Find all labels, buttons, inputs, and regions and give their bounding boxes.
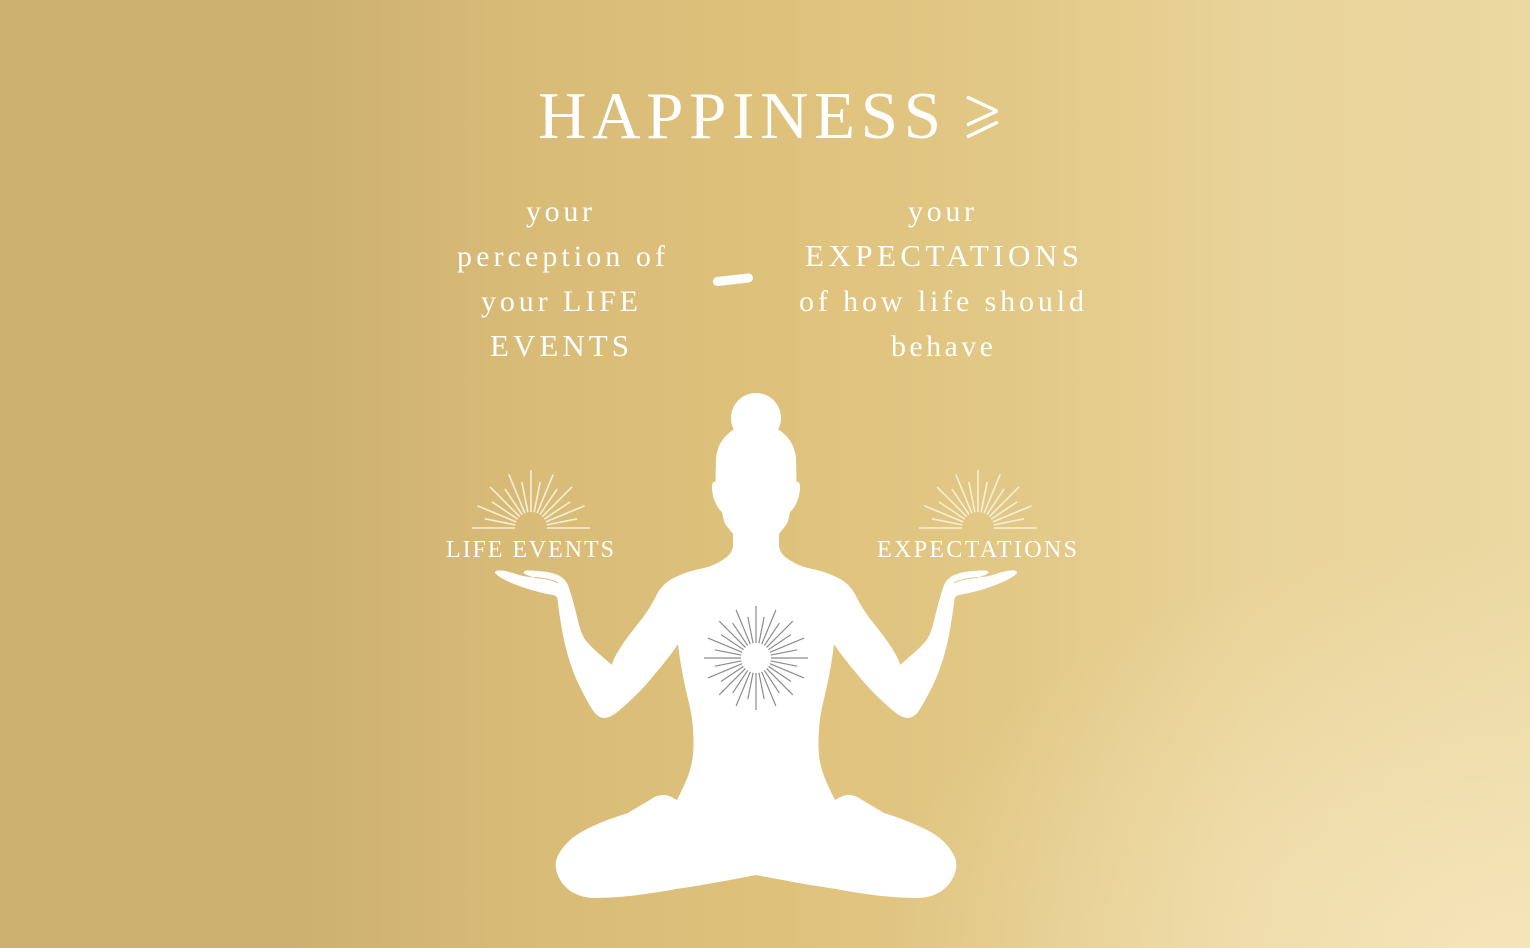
text block: your perception of your life events: your — [526, 195, 592, 228]
label: LIFE EVENTS: LIFE EVENTS — [446, 537, 614, 563]
icon: minus sign — [718, 278, 748, 282]
text block: your expectations of how life should behave: of how life should — [799, 285, 1084, 318]
icon: half sun above right hand — [919, 470, 1037, 528]
text block: your perception of your life events: EVENTS — [490, 328, 629, 363]
icon: half sun above left hand — [472, 470, 590, 528]
title: HAPPINESS: HAPPINESS — [538, 79, 941, 153]
text block: your expectations of how life should behave: behave — [891, 330, 993, 363]
icon: grey radiant sun on chest — [704, 606, 808, 710]
text block: your expectations of how life should behave: EXPECTATIONS — [805, 238, 1079, 273]
text block: your expectations of how life should behave: your — [908, 195, 974, 228]
meditating figure silhouette — [495, 393, 1017, 898]
text block: your perception of your life events: perception of — [457, 240, 665, 273]
text block: your expectations of how life should behave — [799, 195, 1084, 363]
label: EXPECTATIONS: EXPECTATIONS — [877, 537, 1077, 563]
text block: your perception of your life events — [457, 195, 665, 363]
text block: your perception of your life events: your LIFE — [481, 285, 638, 318]
icon: greater than or equal sign — [967, 97, 998, 137]
